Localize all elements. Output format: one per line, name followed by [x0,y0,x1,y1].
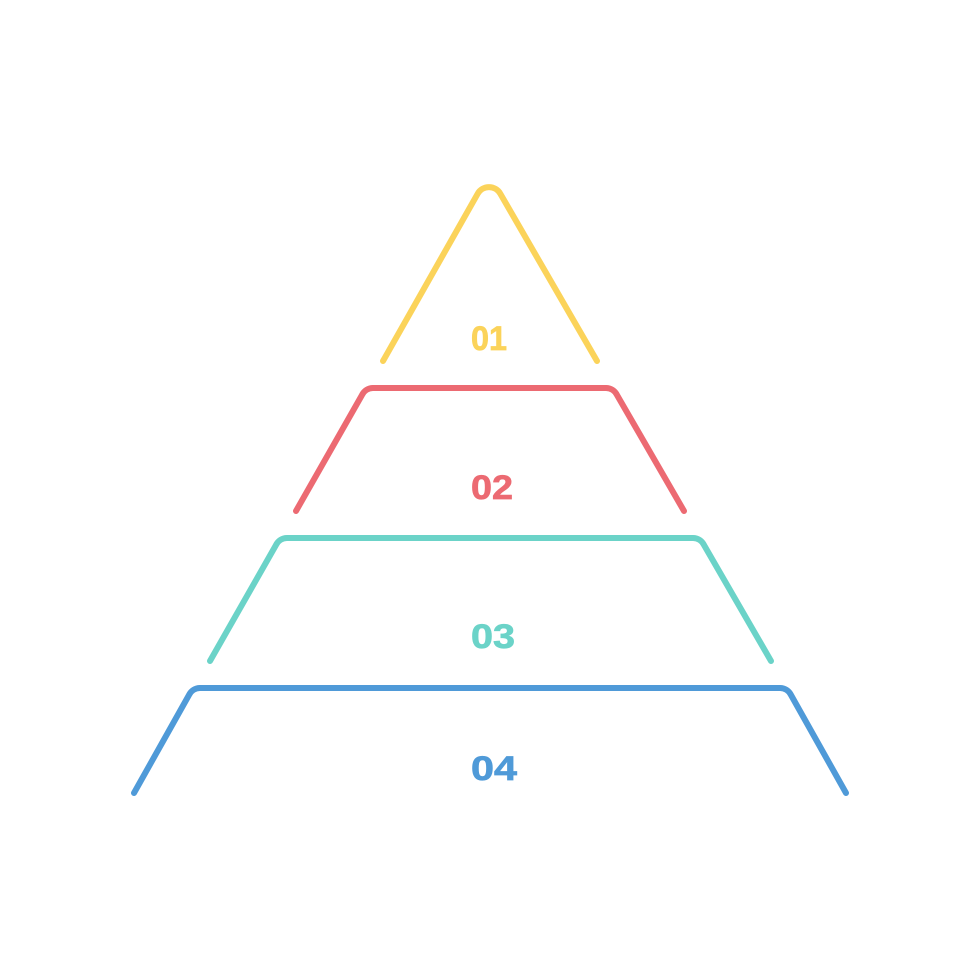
tier 2: red trapezoid [296,388,684,511]
tier 4: blue trapezoid [134,688,846,793]
tier 3: teal trapezoid: 03 [471,618,515,656]
tier 4: blue trapezoid: 04 [471,750,517,788]
tier 3: teal trapezoid [210,538,771,661]
tier 2: red trapezoid: 02 [471,469,513,507]
tier 1: yellow apex: 01 [471,320,507,358]
tier 1: yellow apex [383,187,597,361]
